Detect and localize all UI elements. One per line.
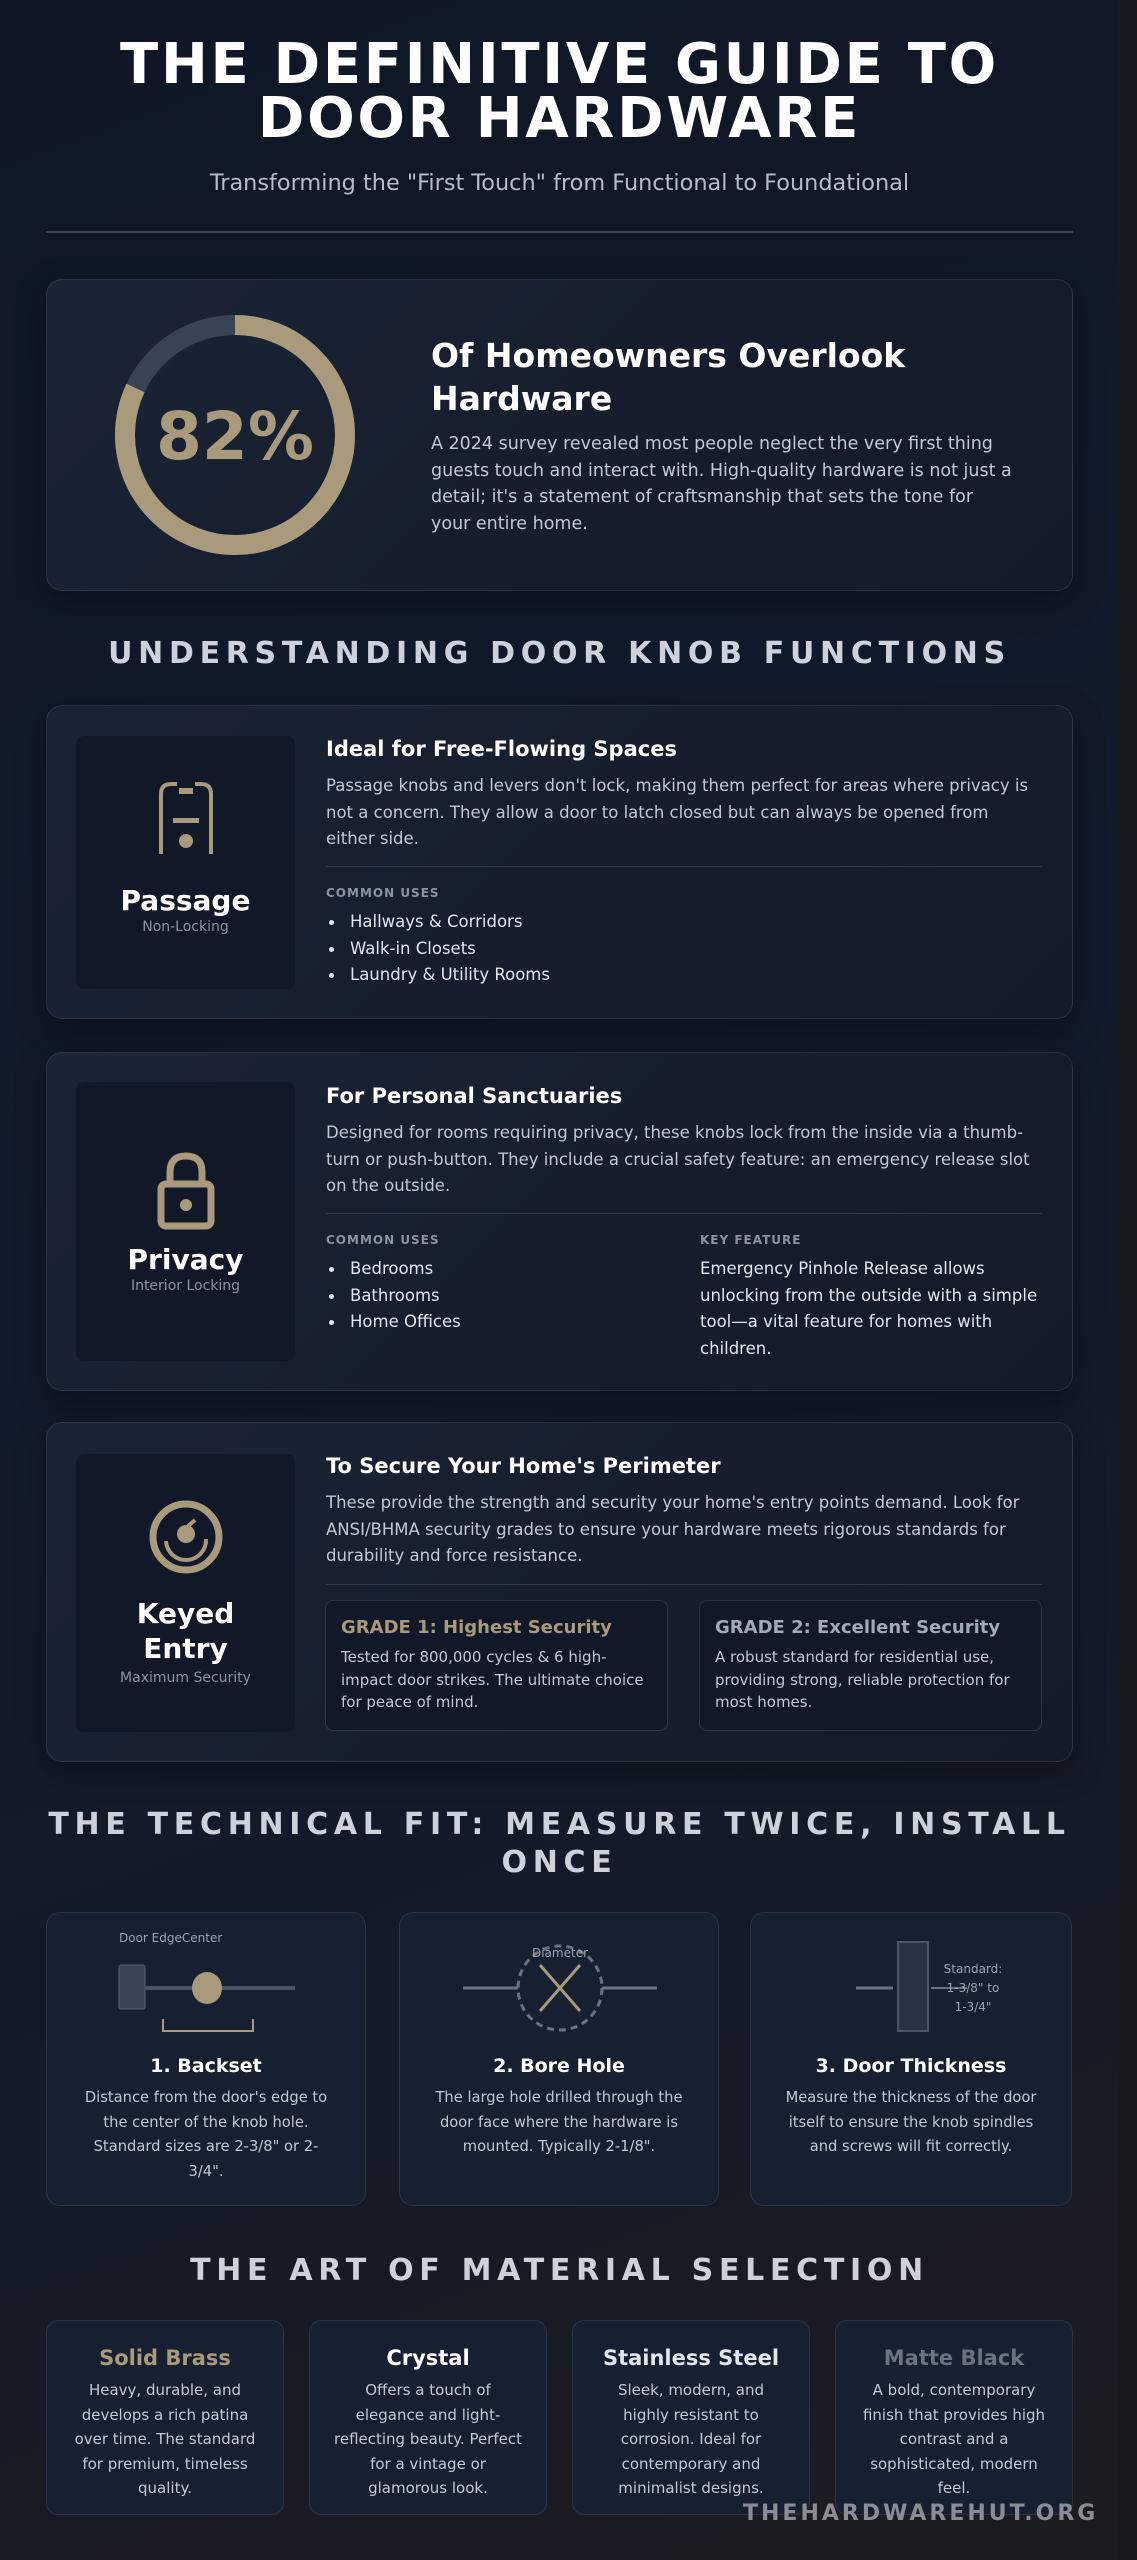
stat heading (431, 336, 906, 418)
subtitle: Transforming the "First Touch" from Functional to Foundational (210, 170, 909, 196)
chart: 82% ring (115, 315, 355, 555)
card: solid brass: Heavy, durable, and develops a rich patina over time. The standard for premium, timeless quality. (75, 2381, 255, 2497)
footer: site name: THEHARDWAREHUT.ORG (743, 2501, 1098, 2526)
title (120, 32, 999, 151)
card: stainless steel (572, 2320, 810, 2515)
stat body: A 2024 survey revealed most people neglect the very first thing guests touch and interact with. High-quality hardware is not just a detail; it's a statement of craftsmanship that sets the tone for your entire home. (431, 434, 1012, 534)
grade 2 box: GRADE 2: Excellent Security (715, 1617, 1000, 1638)
keyed body: These provide the strength and security your home's entry points demand. Look for ANSI/BHMA security grades to ensure your hardware meets rigorous standards for durability and force resistance. (326, 1493, 1019, 1565)
keyed heading: To Secure Your Home's Perimeter (326, 1454, 721, 1478)
bore hole text: The large hole drilled through the door face where the hardware is mounted. Typically 2-1/8". (435, 2089, 683, 2155)
icon box: passage (76, 736, 295, 989)
privacy common uses: Home Offices (350, 1312, 461, 1331)
heading: material selection: THE ART OF MATERIAL SELECTION (190, 2253, 929, 2288)
panel: backset (46, 1912, 366, 2206)
stat heading: Of Homeowners Overlook (431, 336, 905, 375)
label: Passage (121, 884, 250, 935)
stat heading: Hardware (431, 379, 612, 418)
card: stainless steel: Sleek, modern, and highly resistant to corrosion. Ideal for contemporary and minimalist designs. (618, 2381, 764, 2497)
label: Privacy (128, 1243, 243, 1294)
passage common uses: Laundry & Utility Rooms (350, 965, 550, 984)
panel: privacy (46, 1052, 1073, 1391)
panel: passage (46, 705, 1073, 1019)
diagram: backset: Door EdgeCenter (119, 1931, 222, 1945)
card: matte black: Matte Black (884, 2346, 1024, 2370)
privacy key feature: KEY FEATURE (700, 1233, 801, 1247)
heading: understanding door knob functions: UNDERSTANDING DOOR KNOB FUNCTIONS (108, 636, 1011, 671)
grade 1 box: Tested for 800,000 cycles & 6 high-impact door strikes. The ultimate choice for peace of mind. (341, 1648, 644, 1711)
diagram: door thickness: 1-3/4" (955, 2000, 991, 2014)
heading: technical fit: ONCE (502, 1845, 617, 1880)
passage body: Passage knobs and levers don't lock, making them perfect for areas where privacy is not a concern. They allow a door to latch closed but can always be opened from either side. (326, 776, 1028, 848)
label: Privacy: Interior Locking (131, 1278, 240, 1294)
icon box: privacy (76, 1082, 295, 1361)
label: Passage: Non-Locking (142, 919, 229, 935)
title: DOOR HARDWARE (258, 86, 861, 151)
passage heading: Ideal for Free-Flowing Spaces (326, 737, 677, 761)
passage common uses: Hallways & Corridors (350, 912, 522, 931)
heading: technical fit: THE TECHNICAL FIT: MEASURE TWICE, INSTALL (48, 1807, 1071, 1842)
backset title: 1. Backset (150, 2055, 262, 2077)
privacy key feature: Emergency Pinhole Release allows unlocking from the outside with a simple tool—a vital feature for homes with children. (700, 1259, 1037, 1358)
card: crystal (309, 2320, 547, 2515)
panel: keyed entry (46, 1422, 1073, 1762)
thickness title: 3. Door Thickness (816, 2055, 1006, 2077)
diagram: door thickness: 1-3/8" to (947, 1981, 999, 1995)
diagram: bore hole: Diameter (532, 1946, 588, 1960)
backset text: Distance from the door's edge to the center of the knob hole. Standard sizes are 2-3/8" or 2-3/4". (85, 2089, 327, 2180)
grade 2 box: A robust standard for residential use, providing strong, reliable protection for most homes. (715, 1648, 1010, 1711)
privacy common uses (326, 1233, 461, 1331)
label: Passage: Passage (121, 884, 250, 917)
card: crystal: Offers a touch of elegance and light-reflecting beauty. Perfect for a vintage or glamorous look. (334, 2381, 522, 2497)
card: crystal: Crystal (386, 2346, 470, 2370)
label: Keyed Entry: Keyed (137, 1597, 234, 1630)
thickness text: Measure the thickness of the door itself to ensure the knob spindles and screws will fit correctly. (786, 2089, 1036, 2155)
panel: 82% statistic (46, 279, 1073, 591)
grade 1 box: GRADE 1: Highest Security (341, 1617, 612, 1638)
card: matte black (835, 2320, 1073, 2515)
label: Keyed Entry: Maximum Security (120, 1670, 251, 1686)
diagram: door thickness (856, 1941, 1002, 2032)
label: Privacy: Privacy (128, 1243, 243, 1276)
grade 1 box (325, 1600, 668, 1731)
card: solid brass (46, 2320, 284, 2515)
card: solid brass: Solid Brass (99, 2346, 231, 2370)
chart: 82% ring: 82% (156, 398, 314, 475)
diagram: bore hole (463, 1944, 657, 2032)
privacy common uses: Bathrooms (350, 1286, 440, 1304)
passage common uses: COMMON USES (326, 886, 440, 900)
card: stainless steel: Stainless Steel (603, 2346, 779, 2370)
label: Keyed Entry (120, 1597, 251, 1686)
panel: door thickness (750, 1912, 1072, 2206)
passage common uses (326, 886, 550, 984)
privacy body: Designed for rooms requiring privacy, these knobs lock from the inside via a thumb-turn or push-button. They include a crucial safety feature: an emergency release slot on the outside. (326, 1123, 1030, 1195)
card: matte black: A bold, contemporary finish that provides high contrast and a sophisticated, modern feel. (863, 2381, 1045, 2497)
privacy common uses: COMMON USES (326, 1233, 440, 1247)
diagram: backset (118, 1931, 295, 2032)
icon: padlock (158, 1152, 214, 1230)
passage common uses: Walk-in Closets (350, 938, 476, 958)
heading: technical fit (48, 1807, 1071, 1880)
icon box: keyed (76, 1454, 295, 1732)
panel: bore hole (399, 1912, 719, 2206)
bore hole title: 2. Bore Hole (493, 2055, 625, 2077)
title: THE DEFINITIVE GUIDE TO (120, 32, 999, 97)
label: Keyed Entry: Entry (143, 1632, 228, 1665)
privacy common uses: Bedrooms (350, 1259, 433, 1278)
grade 2 box (699, 1600, 1042, 1731)
diagram: door thickness: Standard: (944, 1962, 1002, 1976)
icon: keyed cylinder (150, 1500, 222, 1574)
privacy heading: For Personal Sanctuaries (326, 1084, 622, 1108)
icon: passage handle (159, 782, 213, 854)
